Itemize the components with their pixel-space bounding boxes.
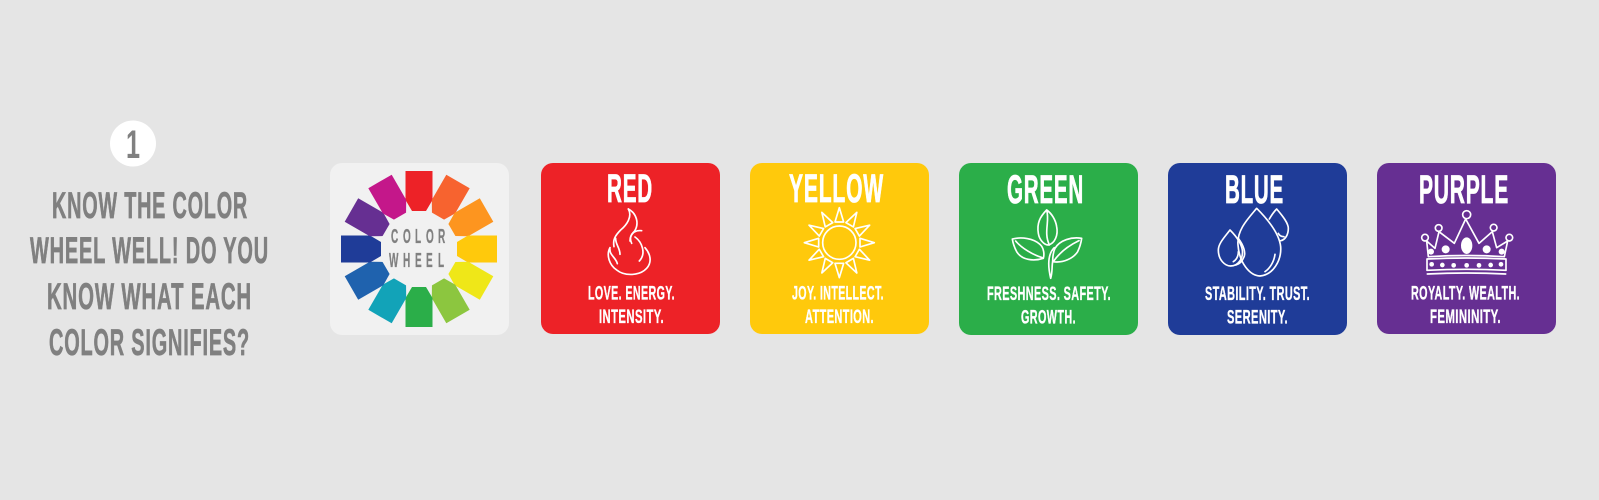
wheel label: WHEEL (389, 251, 444, 272)
heading: KNOW WHAT EACH (47, 276, 252, 317)
yellow text: ATTENTION. (805, 306, 874, 328)
green text: GROWTH. (1021, 306, 1076, 328)
icon: flame (608, 209, 650, 274)
panel: yellow (750, 163, 929, 334)
step number badge: 1 (126, 123, 140, 167)
red title: RED (607, 167, 653, 211)
yellow title: YELLOW (789, 167, 884, 211)
blue text: SERENITY. (1227, 306, 1288, 328)
heading: KNOW THE COLOR (52, 185, 248, 226)
green title: GREEN (1007, 168, 1084, 212)
blue text (1205, 283, 1310, 328)
panel: red (541, 163, 720, 334)
step number badge (110, 120, 156, 167)
wheel label: COLOR (391, 227, 446, 248)
yellow text: JOY. INTELLECT. (792, 282, 884, 304)
icon: crown (1422, 211, 1513, 274)
blue text: STABILITY. TRUST. (1205, 283, 1310, 305)
panel: green (959, 163, 1138, 335)
wheel label (389, 227, 446, 272)
heading: WHEEL WELL! DO YOU (30, 230, 269, 271)
icon: leaves (1012, 210, 1082, 278)
purple text (1411, 282, 1520, 328)
panel: blue (1168, 163, 1347, 335)
red text (588, 282, 675, 328)
yellow text (792, 282, 884, 328)
red text: INTENSITY. (599, 306, 664, 328)
panel: purple (1377, 163, 1556, 334)
blue title: BLUE (1225, 168, 1284, 212)
green text: FRESHNESS. SAFETY. (987, 283, 1111, 305)
red text: LOVE. ENERGY. (588, 282, 675, 304)
heading (30, 185, 269, 363)
panel: color wheel (330, 163, 509, 335)
purple title: PURPLE (1419, 168, 1509, 212)
icon: sun (804, 208, 874, 278)
green text (987, 283, 1111, 328)
heading: COLOR SIGNIFIES? (49, 322, 250, 363)
wheel segments (341, 171, 497, 327)
purple text: FEMININITY. (1430, 306, 1501, 328)
icon: water drops (1218, 208, 1288, 276)
